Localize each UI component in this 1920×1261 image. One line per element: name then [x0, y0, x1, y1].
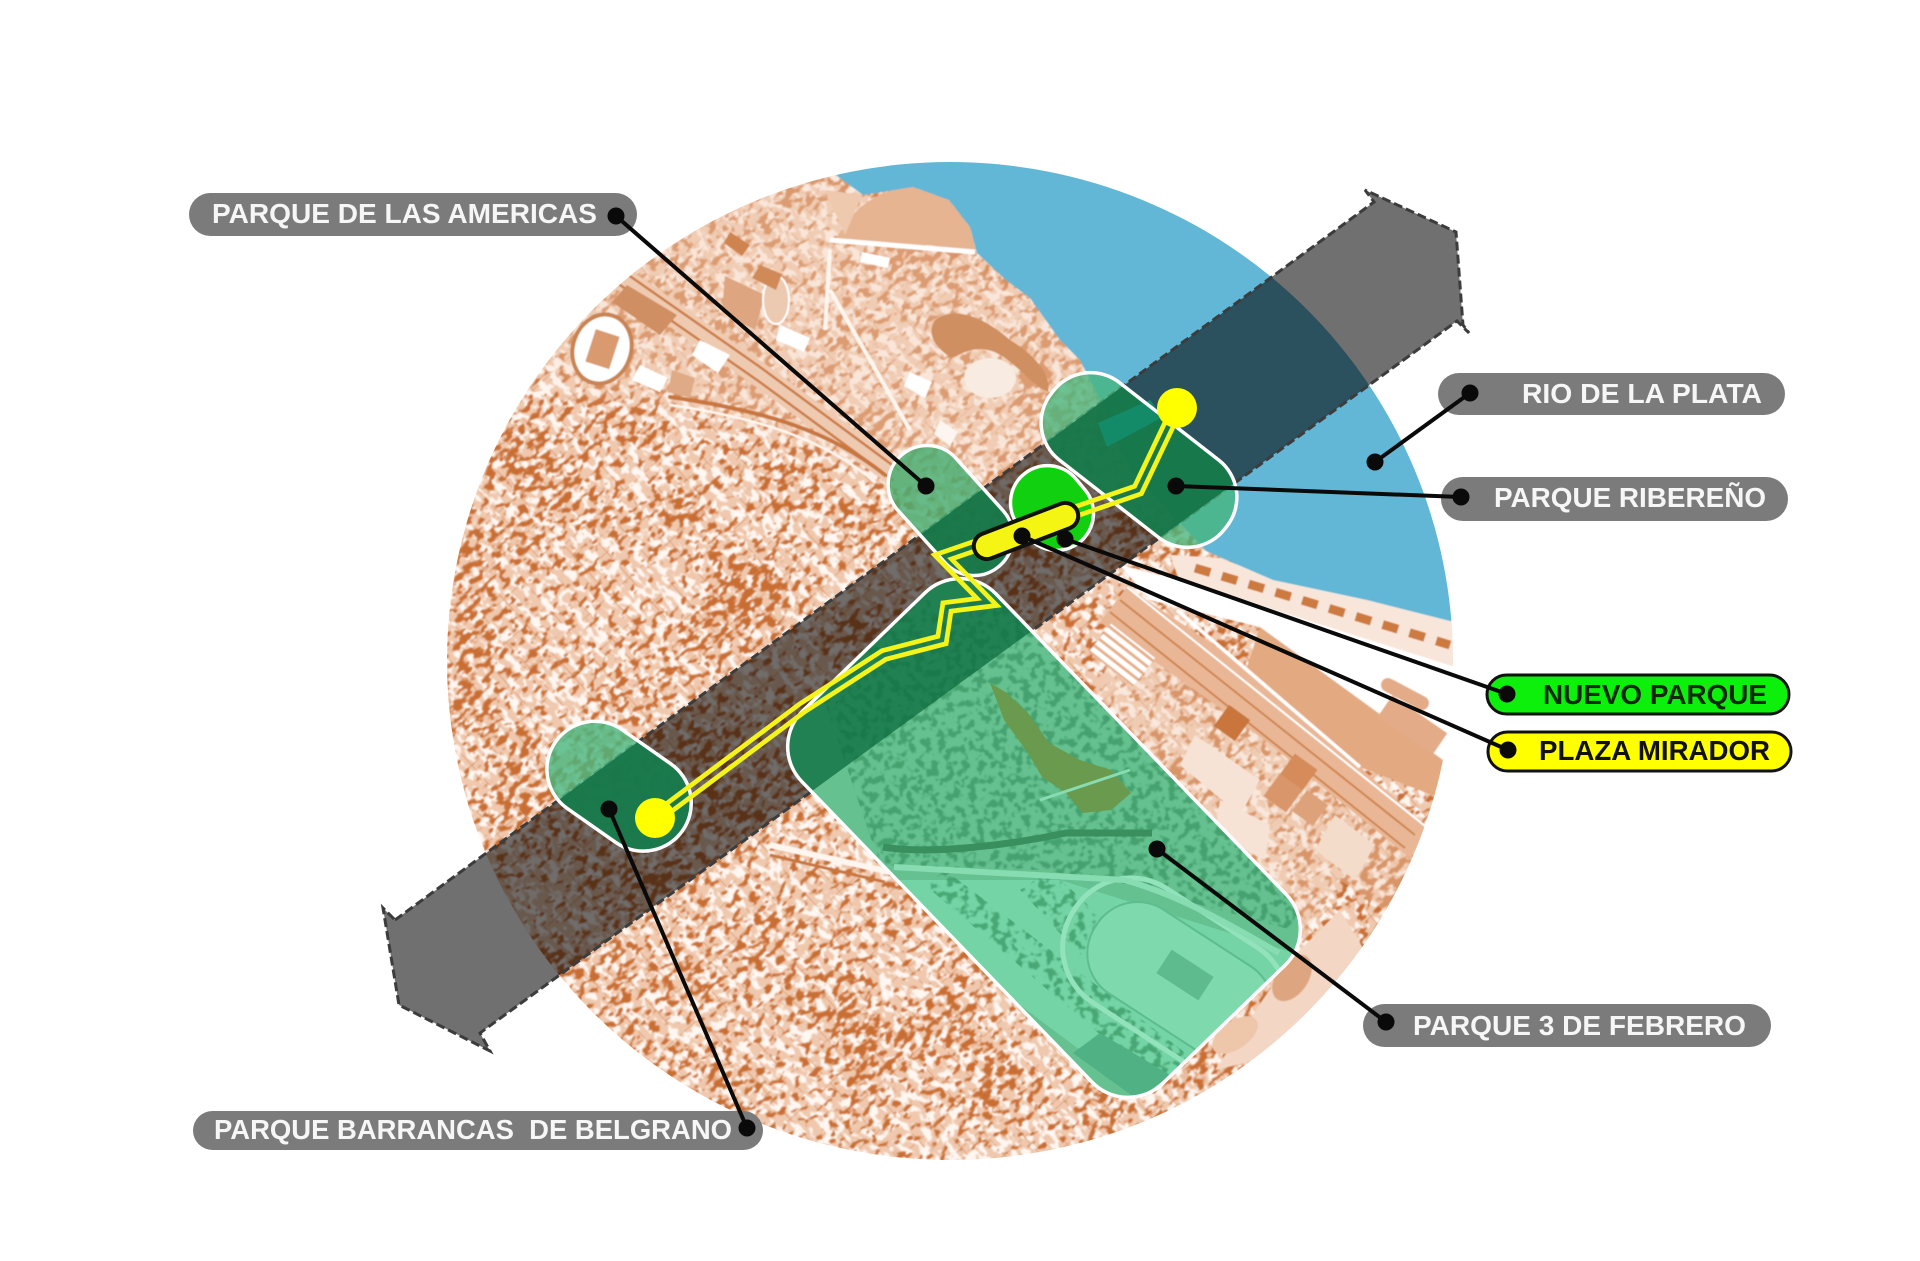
street grid: [447, 162, 1453, 1160]
plaza mirador capsule: [970, 499, 1082, 563]
peninsula: [825, 187, 977, 255]
label: Parque Barrancas de Belgrano: PARQUE BARRANCAS DE BELGRANO: [214, 1114, 732, 1145]
stadium: [570, 312, 634, 386]
route end point: north-east: [1157, 388, 1197, 428]
racetrack: [1060, 875, 1280, 1063]
park: Parque 3 de Febrero: [767, 558, 1321, 1118]
label: Parque de las Americas: [189, 193, 637, 236]
yellow pedestrian route: [655, 408, 1177, 818]
leader: Parque Ribereño: [1170, 480, 1468, 504]
park: Parque de las Americas: [872, 429, 1029, 592]
orange block texture: [447, 176, 1434, 1160]
racecourse margin ovals: [1206, 910, 1370, 1070]
leader: Nuevo Parque: [1058, 532, 1514, 700]
southern lighter area: [900, 880, 1292, 1089]
interior of Parque 3 de Febrero: [839, 602, 1297, 1096]
label: Parque Ribereño: PARQUE RIBEREÑO: [1494, 482, 1766, 513]
white building texture: [447, 175, 1428, 1160]
park: Nuevo Parque: [995, 451, 1109, 565]
river tint inside Parque Ribereño: [1098, 400, 1163, 447]
map base tone: [447, 162, 1453, 1160]
label: Plaza Mirador: PLAZA MIRADOR: [1539, 735, 1770, 766]
northern district tone: [540, 165, 1110, 480]
roads and tree lines: [883, 770, 1279, 953]
label: Parque Ribereño: [1441, 477, 1788, 521]
label: Parque 3 de Febrero: PARQUE 3 DE FEBRERO: [1413, 1010, 1746, 1041]
aerial map disc: [447, 162, 1453, 1160]
label: Plaza Mirador: [1488, 732, 1791, 771]
zoo lake: [931, 314, 1049, 398]
riverside blocks: [1089, 624, 1375, 880]
south tip lawn: [1073, 1033, 1170, 1100]
sports fields and buildings: [612, 232, 958, 446]
route end point: south-west: [635, 798, 675, 838]
riverside strips: [1100, 555, 1458, 960]
label: Rio de la Plata: [1438, 373, 1785, 415]
parks: [528, 354, 1321, 1118]
leader: Plaza Mirador: [1016, 530, 1514, 756]
river: [836, 150, 1470, 626]
park: Parque Barrancas de Belgrano: [528, 702, 710, 870]
leader: Rio de la Plata: [1368, 386, 1476, 468]
vegetation texture: [839, 602, 1297, 1084]
park outlines: [528, 354, 1321, 1118]
label: Parque de las Americas: PARQUE DE LAS AMERICAS: [212, 198, 597, 229]
label: Nuevo Parque: [1487, 675, 1789, 714]
southern rail line: [770, 845, 890, 882]
leader lines: [602, 210, 1514, 1134]
park: Parque Ribereño: [1022, 354, 1256, 566]
label: Rio de la Plata: RIO DE LA PLATA: [1522, 378, 1762, 409]
lake: [990, 683, 1131, 813]
label: Parque 3 de Febrero: [1363, 1004, 1771, 1047]
leader: Parque 3 de Febrero: [1150, 842, 1392, 1028]
rail corridor: [620, 272, 899, 482]
leader: Parque Barrancas de Belgrano: [602, 802, 754, 1134]
label: Nuevo Parque: NUEVO PARQUE: [1543, 679, 1767, 710]
band shading over parks: [560, 387, 1233, 850]
metropolitan axis band: [383, 190, 1469, 1051]
leader: Parque de las Americas: [610, 210, 932, 492]
